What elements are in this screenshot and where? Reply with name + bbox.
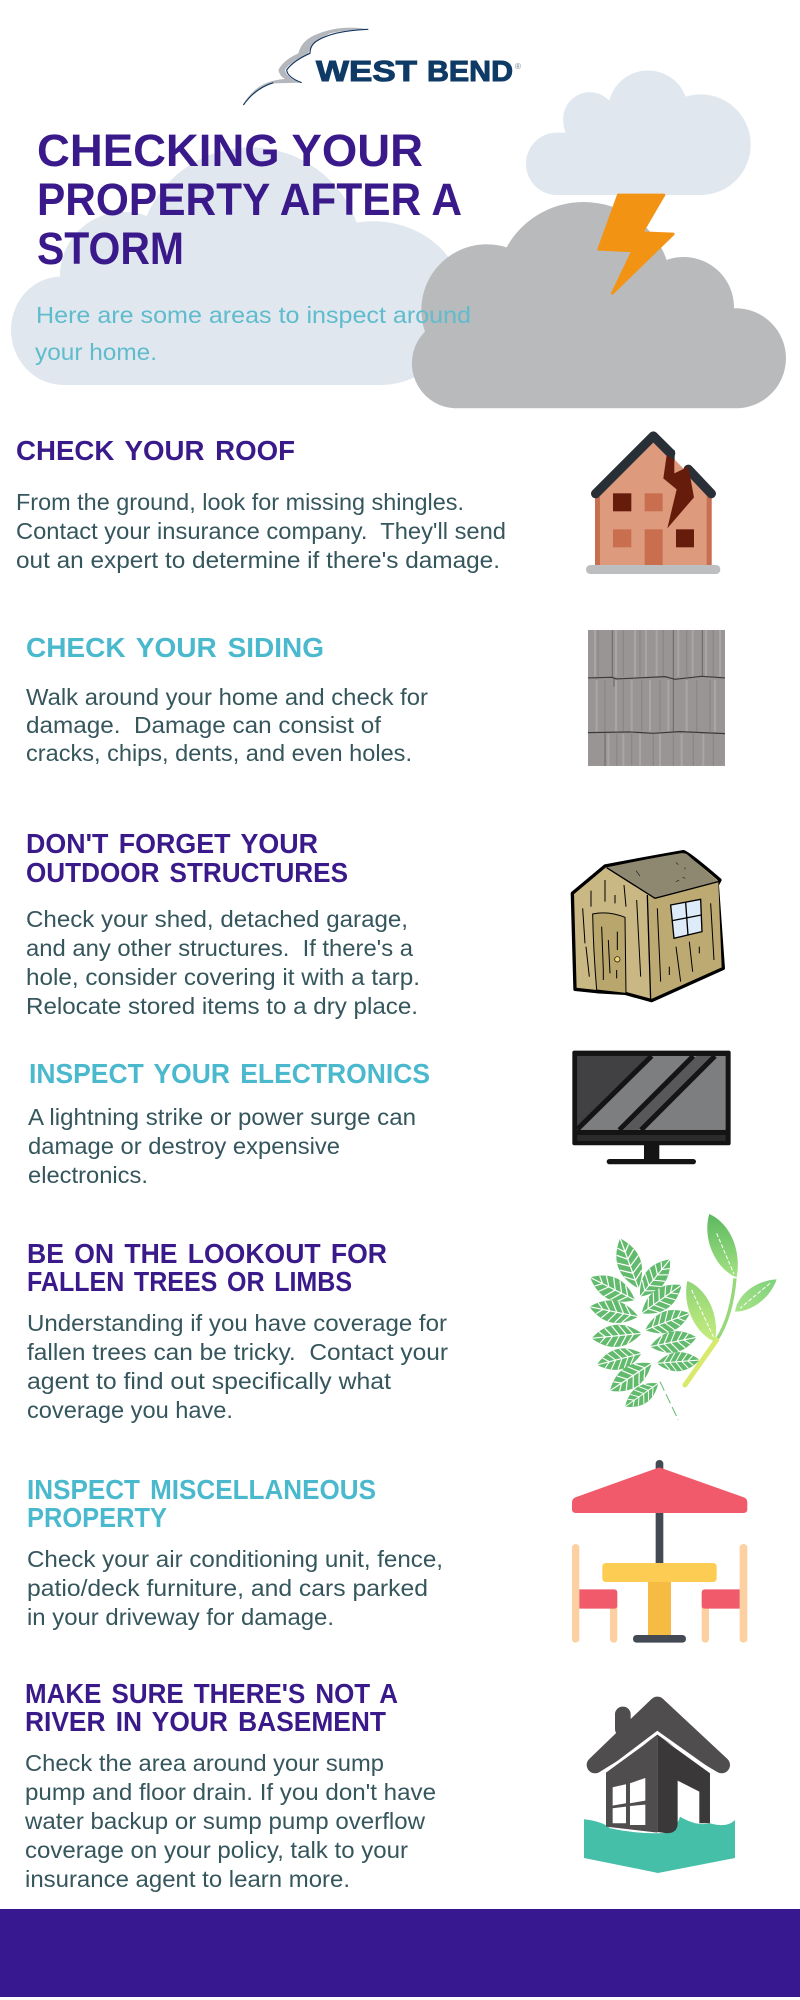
text: electronics body bbox=[28, 1104, 416, 1188]
icon: television bbox=[572, 1051, 731, 1164]
text: siding body bbox=[26, 684, 428, 766]
section: miscellaneous property bbox=[27, 1474, 443, 1630]
section: electronics bbox=[28, 1058, 430, 1188]
heading: electronics: INSPECT YOUR ELECTRONICS bbox=[29, 1058, 430, 1089]
section: check your roof bbox=[16, 435, 506, 573]
heading: basement: MAKE SURE THERE'S NOT A bbox=[25, 1678, 398, 1709]
text: trees body: agent to find out specifically what bbox=[27, 1368, 392, 1394]
section: fallen trees bbox=[27, 1238, 448, 1423]
text: structures body: Check your shed, detached garage, bbox=[26, 906, 408, 932]
heading: check your roof: CHECK YOUR ROOF bbox=[16, 435, 295, 466]
heading: fallen trees bbox=[27, 1238, 387, 1297]
text: miscellaneous body: in your driveway for damage. bbox=[27, 1604, 334, 1630]
heading: fallen trees: BE ON THE LOOKOUT FOR bbox=[27, 1238, 387, 1269]
text: siding body: Walk around your home and check for bbox=[26, 684, 428, 710]
section: outdoor structures bbox=[26, 828, 420, 1019]
text: roof body bbox=[16, 489, 506, 573]
title: STORM bbox=[37, 223, 184, 274]
icon: flooded house bbox=[584, 1705, 735, 1873]
text: siding body: cracks, chips, dents, and even holes. bbox=[26, 740, 412, 766]
text: electronics body: A lightning strike or power surge can bbox=[28, 1104, 416, 1130]
text: miscellaneous body: patio/deck furniture, and cars parked bbox=[27, 1575, 428, 1601]
text: trees body: fallen trees can be tricky. Contact your bbox=[27, 1339, 448, 1365]
logo: West Bend: WEST bbox=[316, 56, 417, 88]
logo: West Bend bbox=[243, 28, 521, 105]
icon: shed bbox=[572, 852, 723, 1001]
footer band bbox=[0, 1909, 800, 1997]
heading: basement: RIVER IN YOUR BASEMENT bbox=[25, 1706, 386, 1737]
text: trees body: coverage you have. bbox=[27, 1397, 233, 1423]
text: roof body: From the ground, look for missing shingles. bbox=[16, 489, 464, 515]
heading: basement bbox=[25, 1678, 398, 1737]
text: basement body: pump and floor drain. If you don't have bbox=[25, 1779, 436, 1805]
text: trees body: Understanding if you have coverage for bbox=[27, 1310, 447, 1336]
text: siding body: damage. Damage can consist of bbox=[26, 712, 382, 738]
text: structures body: and any other structures. If there's a bbox=[26, 935, 413, 961]
text: basement body: coverage on your policy, talk to your bbox=[25, 1837, 408, 1863]
icon: siding texture bbox=[588, 630, 725, 766]
section: basement bbox=[24, 1678, 436, 1892]
text: miscellaneous body: Check your air conditioning unit, fence, bbox=[27, 1546, 443, 1572]
cloud: grey storm cloud bbox=[412, 202, 786, 408]
text: structures body: Relocate stored items to a dry place. bbox=[26, 993, 418, 1019]
title: PROPERTY AFTER A bbox=[37, 174, 462, 225]
text: trees body bbox=[27, 1310, 448, 1423]
subtitle bbox=[35, 302, 471, 365]
logo: West Bend: ® bbox=[515, 62, 521, 71]
heading: miscellaneous property: INSPECT MISCELLANEOUS bbox=[27, 1474, 376, 1505]
cloud: upper pale cloud bbox=[526, 70, 751, 195]
title: CHECKING YOUR bbox=[37, 125, 423, 176]
text: structures body: hole, consider covering it with a tarp. bbox=[26, 964, 420, 990]
icon: damaged house bbox=[586, 436, 720, 574]
cloud: large pale cloud behind title bbox=[11, 147, 463, 385]
text: basement body: Check the area around your sump bbox=[25, 1750, 384, 1776]
icon: lightning bolt bbox=[599, 195, 673, 293]
heading: miscellaneous property: PROPERTY bbox=[27, 1502, 167, 1533]
text: roof body: out an expert to determine if there's damage. bbox=[16, 547, 500, 573]
icon: leaves bbox=[585, 1214, 777, 1420]
text: roof body: Contact your insurance company. They'll send bbox=[16, 518, 506, 544]
heading: check your siding: CHECK YOUR SIDING bbox=[26, 632, 324, 663]
logo: West Bend: BEND bbox=[427, 56, 513, 88]
heading: miscellaneous property bbox=[27, 1474, 376, 1533]
text: basement body: insurance agent to learn more. bbox=[25, 1866, 350, 1892]
text: miscellaneous body bbox=[27, 1546, 443, 1630]
title bbox=[37, 125, 462, 274]
text: structures body bbox=[26, 906, 420, 1019]
subtitle: Here are some areas to inspect around bbox=[36, 302, 471, 328]
text: basement body: water backup or sump pump overflow bbox=[24, 1808, 425, 1834]
text: electronics body: damage or destroy expensive bbox=[28, 1133, 340, 1159]
icon: patio table and umbrella bbox=[572, 1460, 747, 1643]
text: basement body bbox=[24, 1750, 436, 1892]
heading: fallen trees: FALLEN TREES OR LIMBS bbox=[27, 1266, 352, 1297]
heading: outdoor structures: DON'T FORGET YOUR bbox=[26, 828, 318, 859]
heading: outdoor structures: OUTDOOR STRUCTURES bbox=[26, 857, 348, 888]
subtitle: your home. bbox=[35, 339, 157, 365]
text: electronics body: electronics. bbox=[28, 1162, 148, 1188]
section: check your siding bbox=[26, 632, 428, 766]
heading: outdoor structures bbox=[26, 828, 348, 888]
